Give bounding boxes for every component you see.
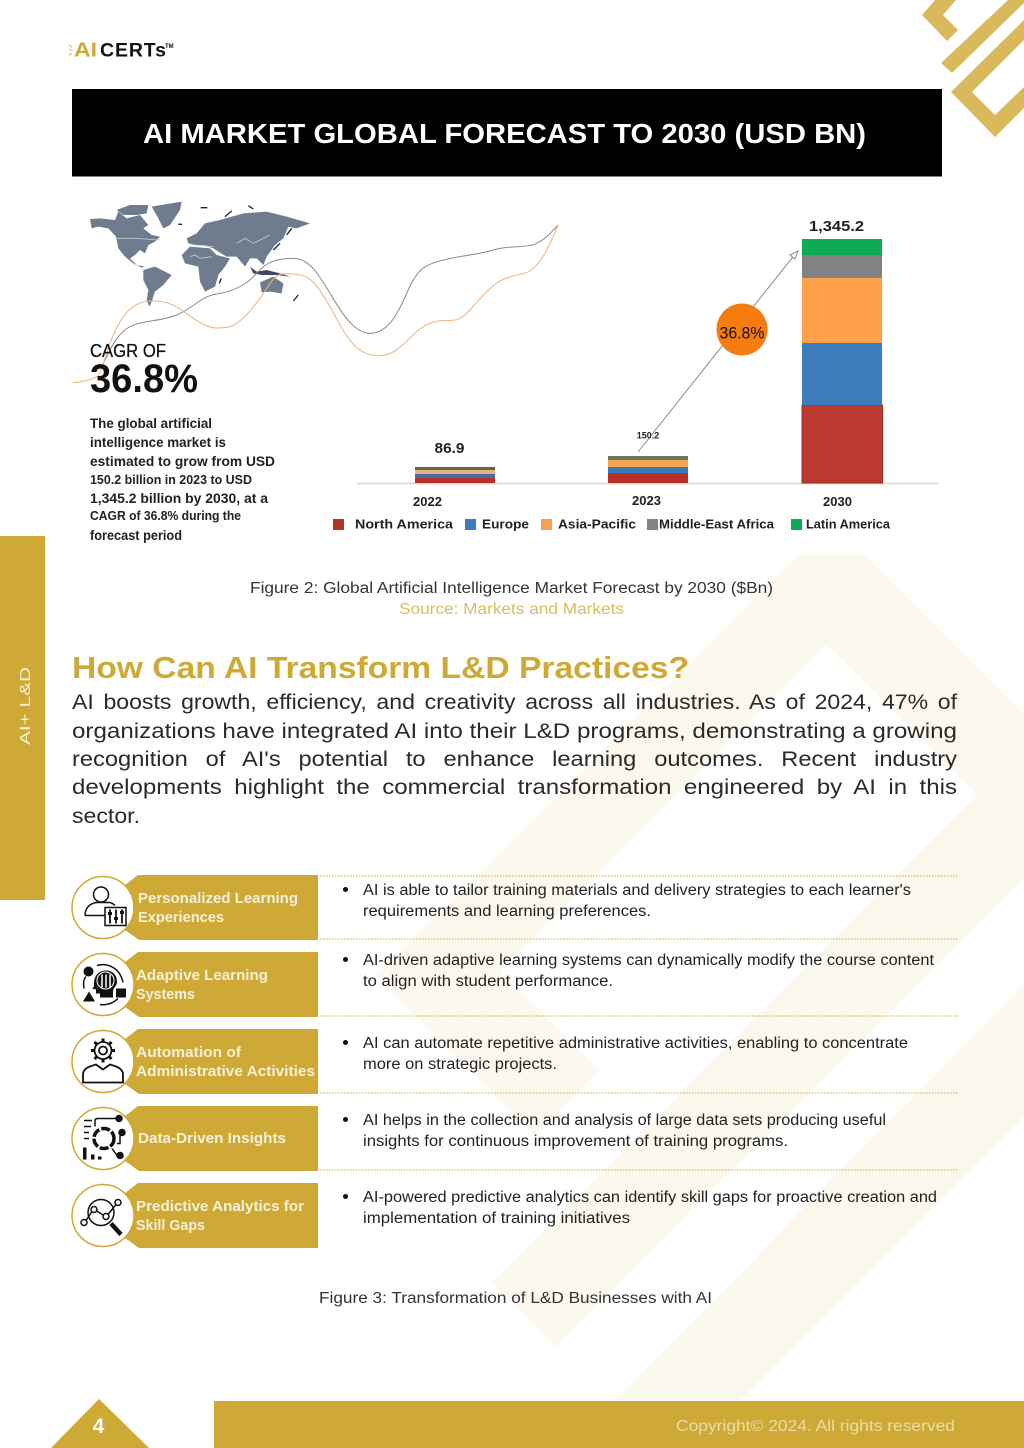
value labels [434, 218, 864, 457]
CAGR text block [90, 341, 275, 543]
chart legend: Asia-Pacific [558, 516, 636, 532]
icon: head with loop [83, 965, 126, 1005]
bullet 4: AI helps in the collection and analysis of large data sets producing useful [363, 1112, 886, 1129]
section heading: How Can AI Transform L&D Practices? [72, 650, 689, 685]
figure 2 caption [250, 580, 773, 618]
CAGR text block: estimated to grow from USD [90, 453, 275, 469]
side tab [0, 536, 45, 900]
row 3: automation [72, 1029, 318, 1094]
bullet 1: AI is able to tailor training materials and delivery strategies to each learner's [363, 882, 911, 899]
CAGR text block: 1,345.2 billion by 2030, at a [90, 490, 268, 506]
chart legend: Latin America [806, 516, 891, 532]
value labels: 150.2 [637, 430, 659, 440]
chart legend: Europe [482, 516, 529, 532]
bullet 4: insights for continuous improvement of training programs. [363, 1133, 788, 1150]
year labels: 2030 [823, 494, 852, 509]
CAGR text block: intelligence market is [90, 434, 226, 450]
figure 2 caption: Source: Markets and Markets [399, 601, 624, 618]
row 2: adaptive learning: Systems [136, 986, 195, 1003]
bullet 5: implementation of training initiatives [363, 1210, 630, 1227]
row 3: automation: Automation of [136, 1044, 242, 1061]
year labels: 2022 [413, 494, 442, 509]
intro paragraph: sector. [72, 805, 140, 828]
CAGR text block: CAGR OF [90, 341, 166, 361]
bullet 2: to align with student performance. [363, 973, 613, 990]
bullet 3: AI can automate repetitive administrative activities, enabling to concentrate [363, 1035, 908, 1052]
CAGR bubble [716, 304, 768, 356]
intro paragraph [72, 691, 958, 828]
figure 2 caption: Figure 2: Global Artificial Intelligence Market Forecast by 2030 ($Bn) [250, 580, 773, 597]
footer bar: Copyright© 2024. All rights reserved [676, 1418, 955, 1435]
icon: person with gear [83, 1038, 123, 1082]
CAGR text block: The global artificial [90, 415, 212, 431]
CAGR text block: forecast period [90, 528, 182, 543]
bar 2022 [415, 467, 495, 483]
logo: AICERTs: TM [165, 44, 174, 50]
world map [90, 202, 310, 307]
row 4: data-driven insights: Data-Driven Insights [138, 1130, 286, 1147]
row 4: data-driven insights [72, 1106, 318, 1171]
row 1: personalized learning: Personalized Learning [138, 890, 298, 907]
value labels: 86.9 [434, 440, 464, 457]
row 2: adaptive learning [72, 952, 318, 1017]
logo: AICERTs: CERTs [100, 40, 166, 62]
bullet 2: AI-driven adaptive learning systems can dynamically modify the course content [363, 952, 935, 969]
intro paragraph: AI boosts growth, efficiency, and creativity across all industries. As of 2024, 47% of [72, 691, 957, 714]
page number badge [51, 1399, 149, 1448]
top-right corner chevrons [922, 0, 1024, 137]
CAGR text block: 36.8% [90, 357, 198, 401]
background watermark chevrons [376, 555, 1024, 1400]
intro paragraph: recognition of AI's potential to enhance learning outcomes. Recent industry [72, 748, 958, 771]
bullet 5: AI-powered predictive analytics can identify skill gaps for proactive creation and [363, 1189, 937, 1206]
logo: AICERTs: AI [74, 40, 97, 62]
intro paragraph: organizations have integrated AI into their L&D programs, demonstrating a growing [72, 720, 957, 743]
CAGR bubble: 36.8% [720, 324, 765, 342]
title banner [72, 89, 942, 176]
bar 2023 [608, 456, 688, 483]
intro paragraph: developments highlight the commercial transformation engineered by AI in this [72, 776, 957, 799]
CAGR text block: CAGR of 36.8% during the [90, 509, 241, 523]
bullet 4 [343, 1112, 886, 1150]
bullet 1 [343, 882, 911, 920]
bullet 3 [343, 1035, 908, 1073]
icon: data analytics [83, 1116, 125, 1160]
row 5: predictive analytics [72, 1183, 318, 1248]
growth arrow [638, 251, 798, 452]
row 1: personalized learning: Experiences [138, 909, 224, 926]
chart legend: North America [355, 516, 454, 532]
row 3: automation: Administrative Activities [136, 1063, 315, 1080]
stacked bar chart [333, 218, 938, 532]
row 5: predictive analytics: Skill Gaps [136, 1217, 205, 1234]
chart legend [333, 516, 891, 532]
row 2: adaptive learning: Adaptive Learning [136, 967, 268, 984]
row 1: personalized learning [72, 875, 318, 940]
year labels [413, 493, 852, 509]
bullet 5 [343, 1189, 937, 1227]
icon: person with sliders [85, 887, 126, 926]
logo: AICERTs [69, 40, 174, 62]
bullet 3: more on strategic projects. [363, 1056, 557, 1073]
icon: magnifier graph [81, 1200, 121, 1234]
bar 2030 [802, 239, 882, 483]
side tab: AI+ L&D [17, 667, 34, 745]
bullet 2 [343, 952, 935, 990]
chart legend: Middle-East Africa [659, 516, 775, 532]
page number badge: 4 [93, 1415, 105, 1438]
value labels: 1,345.2 [809, 218, 864, 235]
footer bar [214, 1401, 1024, 1448]
year labels: 2023 [632, 493, 661, 508]
decorative curves: grey and orange [73, 225, 558, 383]
row 5: predictive analytics: Predictive Analytics for [136, 1198, 304, 1215]
figure 3 caption: Figure 3: Transformation of L&D Businesses with AI [319, 1290, 712, 1307]
title banner: AI MARKET GLOBAL FORECAST TO 2030 (USD BN) [143, 118, 866, 149]
CAGR text block: 150.2 billion in 2023 to USD [90, 473, 252, 487]
bullet 1: requirements and learning preferences. [363, 903, 651, 920]
